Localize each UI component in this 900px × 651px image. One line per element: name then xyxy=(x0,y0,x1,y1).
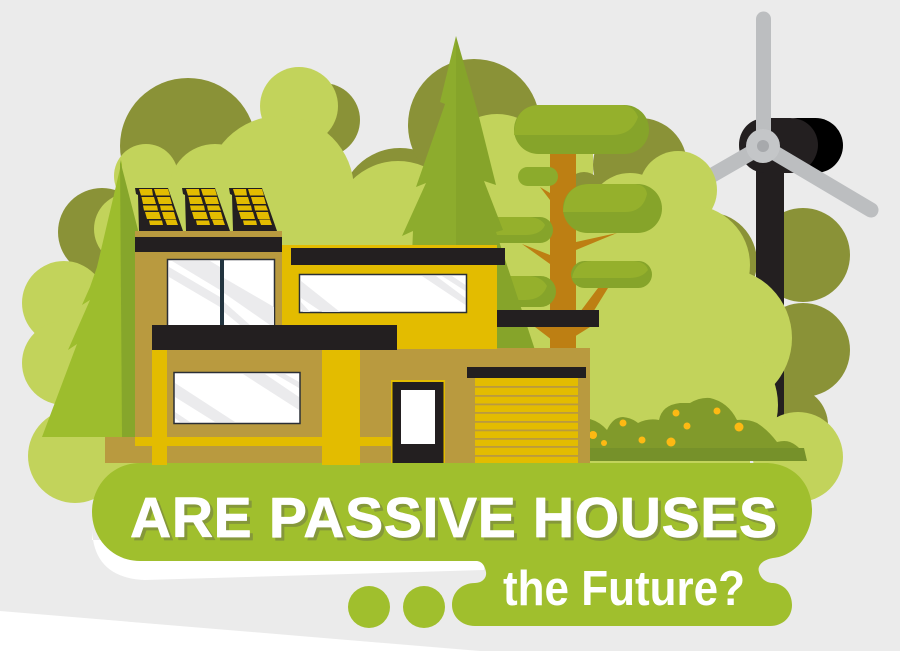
middle roof bar xyxy=(152,325,397,350)
banner dot left xyxy=(348,586,390,628)
house lower tan wall xyxy=(135,348,590,463)
banner dot right xyxy=(403,586,445,628)
solar panel 2 xyxy=(182,188,230,231)
turbine blades xyxy=(690,19,871,210)
large pine tree xyxy=(402,36,535,350)
side canopy bar xyxy=(497,310,599,327)
turbine hub xyxy=(746,129,780,163)
roof bar upper left xyxy=(135,237,282,252)
house upper tan wall xyxy=(135,231,282,351)
lower window xyxy=(174,372,300,424)
roof bar upper right xyxy=(291,248,505,265)
house yellow upper block xyxy=(282,245,497,349)
solar panel 1 xyxy=(135,188,183,231)
house base slab xyxy=(105,437,590,463)
bush base xyxy=(590,448,807,461)
title banner xyxy=(92,463,812,626)
title: are passive houses: ARE PASSIVE HOUSES xyxy=(130,486,777,550)
house xyxy=(105,188,599,465)
title banner white shadow xyxy=(92,510,484,580)
solar panel 3 xyxy=(229,188,277,231)
garage xyxy=(467,367,586,463)
flowering bush xyxy=(589,398,807,461)
bush flowers xyxy=(589,408,744,446)
light green foliage mass xyxy=(22,67,843,503)
tree canopies xyxy=(470,105,662,307)
upper double window xyxy=(168,259,274,328)
yellow column left xyxy=(152,350,167,465)
front door xyxy=(391,380,445,463)
yellow trim band xyxy=(135,437,392,446)
long upper window xyxy=(300,274,466,312)
small olive tree behind canopy xyxy=(566,172,602,208)
subtitle: the future?: the Future? xyxy=(503,562,745,616)
tree with rounded canopies xyxy=(470,105,662,352)
bush body xyxy=(590,398,807,461)
turbine nacelle xyxy=(739,118,843,173)
turbine tower xyxy=(756,160,784,418)
wind turbine xyxy=(690,19,871,418)
dark olive background trees xyxy=(58,59,850,463)
left pine tree xyxy=(42,160,138,437)
tree trunk and branches xyxy=(522,150,617,352)
yellow column centre xyxy=(322,350,360,465)
